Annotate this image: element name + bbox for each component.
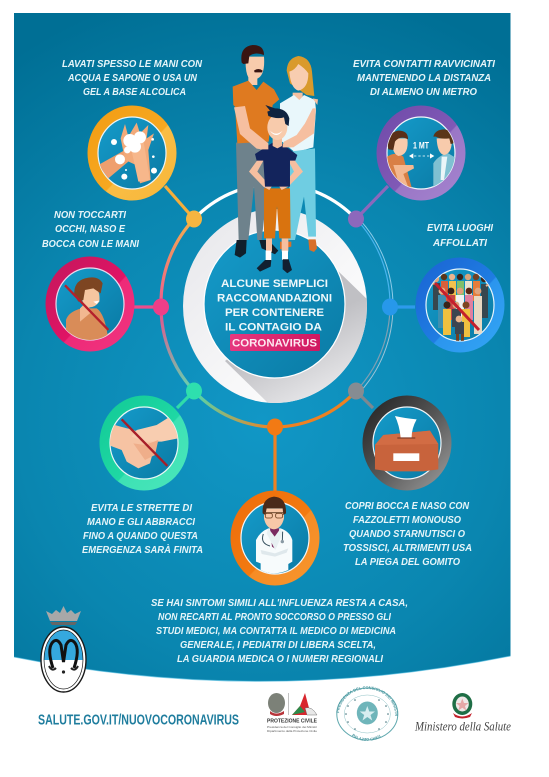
central heading xyxy=(217,278,332,351)
light edge of the curved panel xyxy=(14,656,510,681)
central heading: RACCOMANDAZIONI xyxy=(217,292,332,304)
logo: ministero della salute xyxy=(414,693,511,734)
text: do not touch: NON TOCCARTI xyxy=(54,210,127,221)
url: SALUTE.GOV.IT/NUOVOCORONAVIRUS xyxy=(38,712,239,728)
central heading: PER CONTENERE xyxy=(225,307,324,319)
logo: palazzo chigi seal: PRESIDENZA DEL CONSIGLIO DEI MINISTRI xyxy=(336,686,398,716)
text: stay at home advice: GENERALE, I PEDIATRI DI LIBERA SCELTA, xyxy=(180,640,376,651)
icon: do not touch face xyxy=(46,256,134,352)
family illustration xyxy=(233,45,318,273)
text: no handshakes: EVITA LE STRETTE DI xyxy=(91,503,193,514)
panel: blue background xyxy=(14,13,510,681)
text: no handshakes xyxy=(82,503,203,556)
icon: washing hands xyxy=(88,106,176,200)
text: avoid crowds: AFFOLLATI xyxy=(432,238,488,249)
text: cover mouth and nose: FAZZOLETTI MONOUSO xyxy=(353,515,461,526)
central ring xyxy=(183,209,367,403)
text: cover mouth and nose xyxy=(343,501,472,568)
icon: no handshakes xyxy=(100,396,188,490)
text: cover mouth and nose: COPRI BOCCA E NASO CON xyxy=(345,501,469,512)
logo: ministero della salute: Ministero della Salute xyxy=(414,718,511,734)
text: no handshakes: EMERGENZA SARÀ FINITA xyxy=(82,543,203,556)
text: wash hands: ACQUA E SAPONE O USA UN xyxy=(67,73,197,84)
text: avoid crowds: EVITA LUOGHI xyxy=(427,223,494,234)
text: cover mouth and nose: QUANDO STARNUTISCI O xyxy=(349,529,465,540)
text: no handshakes: FINO A QUANDO QUESTA xyxy=(83,531,198,542)
text: do not touch: BOCCA CON LE MANI xyxy=(42,239,140,250)
boy xyxy=(249,105,303,273)
text: avoid close contact xyxy=(353,59,496,98)
logo: protezione civile: Dipartimento della Protezione Civile xyxy=(267,729,317,733)
text: stay at home advice xyxy=(151,598,408,665)
text: avoid close contact: EVITA CONTATTI RAVVICINATI xyxy=(353,59,496,70)
text: wash hands: LAVATI SPESSO LE MANI CON xyxy=(62,59,202,70)
outer connector ring xyxy=(161,184,393,427)
text: stay at home advice: SE HAI SINTOMI SIMILI ALL'INFLUENZA RESTA A CASA, xyxy=(151,598,408,609)
text: do not touch xyxy=(42,210,140,250)
text: stay at home advice: LA GUARDIA MEDICA O I NUMERI REGIONALI xyxy=(177,654,384,665)
central heading: ALCUNE SEMPLICI xyxy=(221,278,328,290)
text: no handshakes: MANO E GLI ABBRACCI xyxy=(87,517,196,528)
central heading: IL CONTAGIO DA xyxy=(225,322,322,334)
logo: palazzo chigi seal: PALAZZO CHIGI xyxy=(352,734,381,741)
text: stay at home advice: STUDI MEDICI, MA CONTATTA IL MEDICO DI MEDICINA xyxy=(156,626,396,637)
label: 1 MT: 1 MT xyxy=(413,140,429,150)
text: do not touch: OCCHI, NASO E xyxy=(55,224,126,235)
text: avoid close contact: DI ALMENO UN METRO xyxy=(370,87,477,98)
connector nodes xyxy=(153,210,398,436)
icon: crowded places xyxy=(416,258,504,352)
woman xyxy=(280,56,318,252)
central heading: CORONAVIRUS xyxy=(232,338,317,350)
logo: protezione civile: Presidenza del Consiglio dei Ministri xyxy=(267,725,317,729)
logo: palazzo chigi seal xyxy=(336,686,398,741)
connector spokes xyxy=(134,186,415,492)
logo: protezione civile: PROTEZIONE CIVILE xyxy=(267,718,318,724)
icon: keep one metre distance xyxy=(376,106,466,200)
text: cover mouth and nose: LA PIEGA DEL GOMITO xyxy=(355,557,460,568)
icon: tissue box xyxy=(362,396,452,490)
text: stay at home advice: NON RECARTI AL PRONTO SOCCORSO O PRESSO GLI xyxy=(158,612,392,623)
text: wash hands: GEL A BASE ALCOLICA xyxy=(83,87,186,98)
text: avoid crowds xyxy=(427,223,494,249)
logo: crowned crest xyxy=(41,606,86,692)
woman and man hands xyxy=(260,143,292,149)
man xyxy=(233,45,279,258)
text: wash hands xyxy=(62,59,202,98)
icon: doctor xyxy=(230,490,320,586)
text: avoid close contact: MANTENENDO LA DISTANZA xyxy=(357,73,491,84)
logo: protezione civile xyxy=(267,693,318,733)
text: cover mouth and nose: TOSSISCI, ALTRIMENTI USA xyxy=(343,543,472,554)
